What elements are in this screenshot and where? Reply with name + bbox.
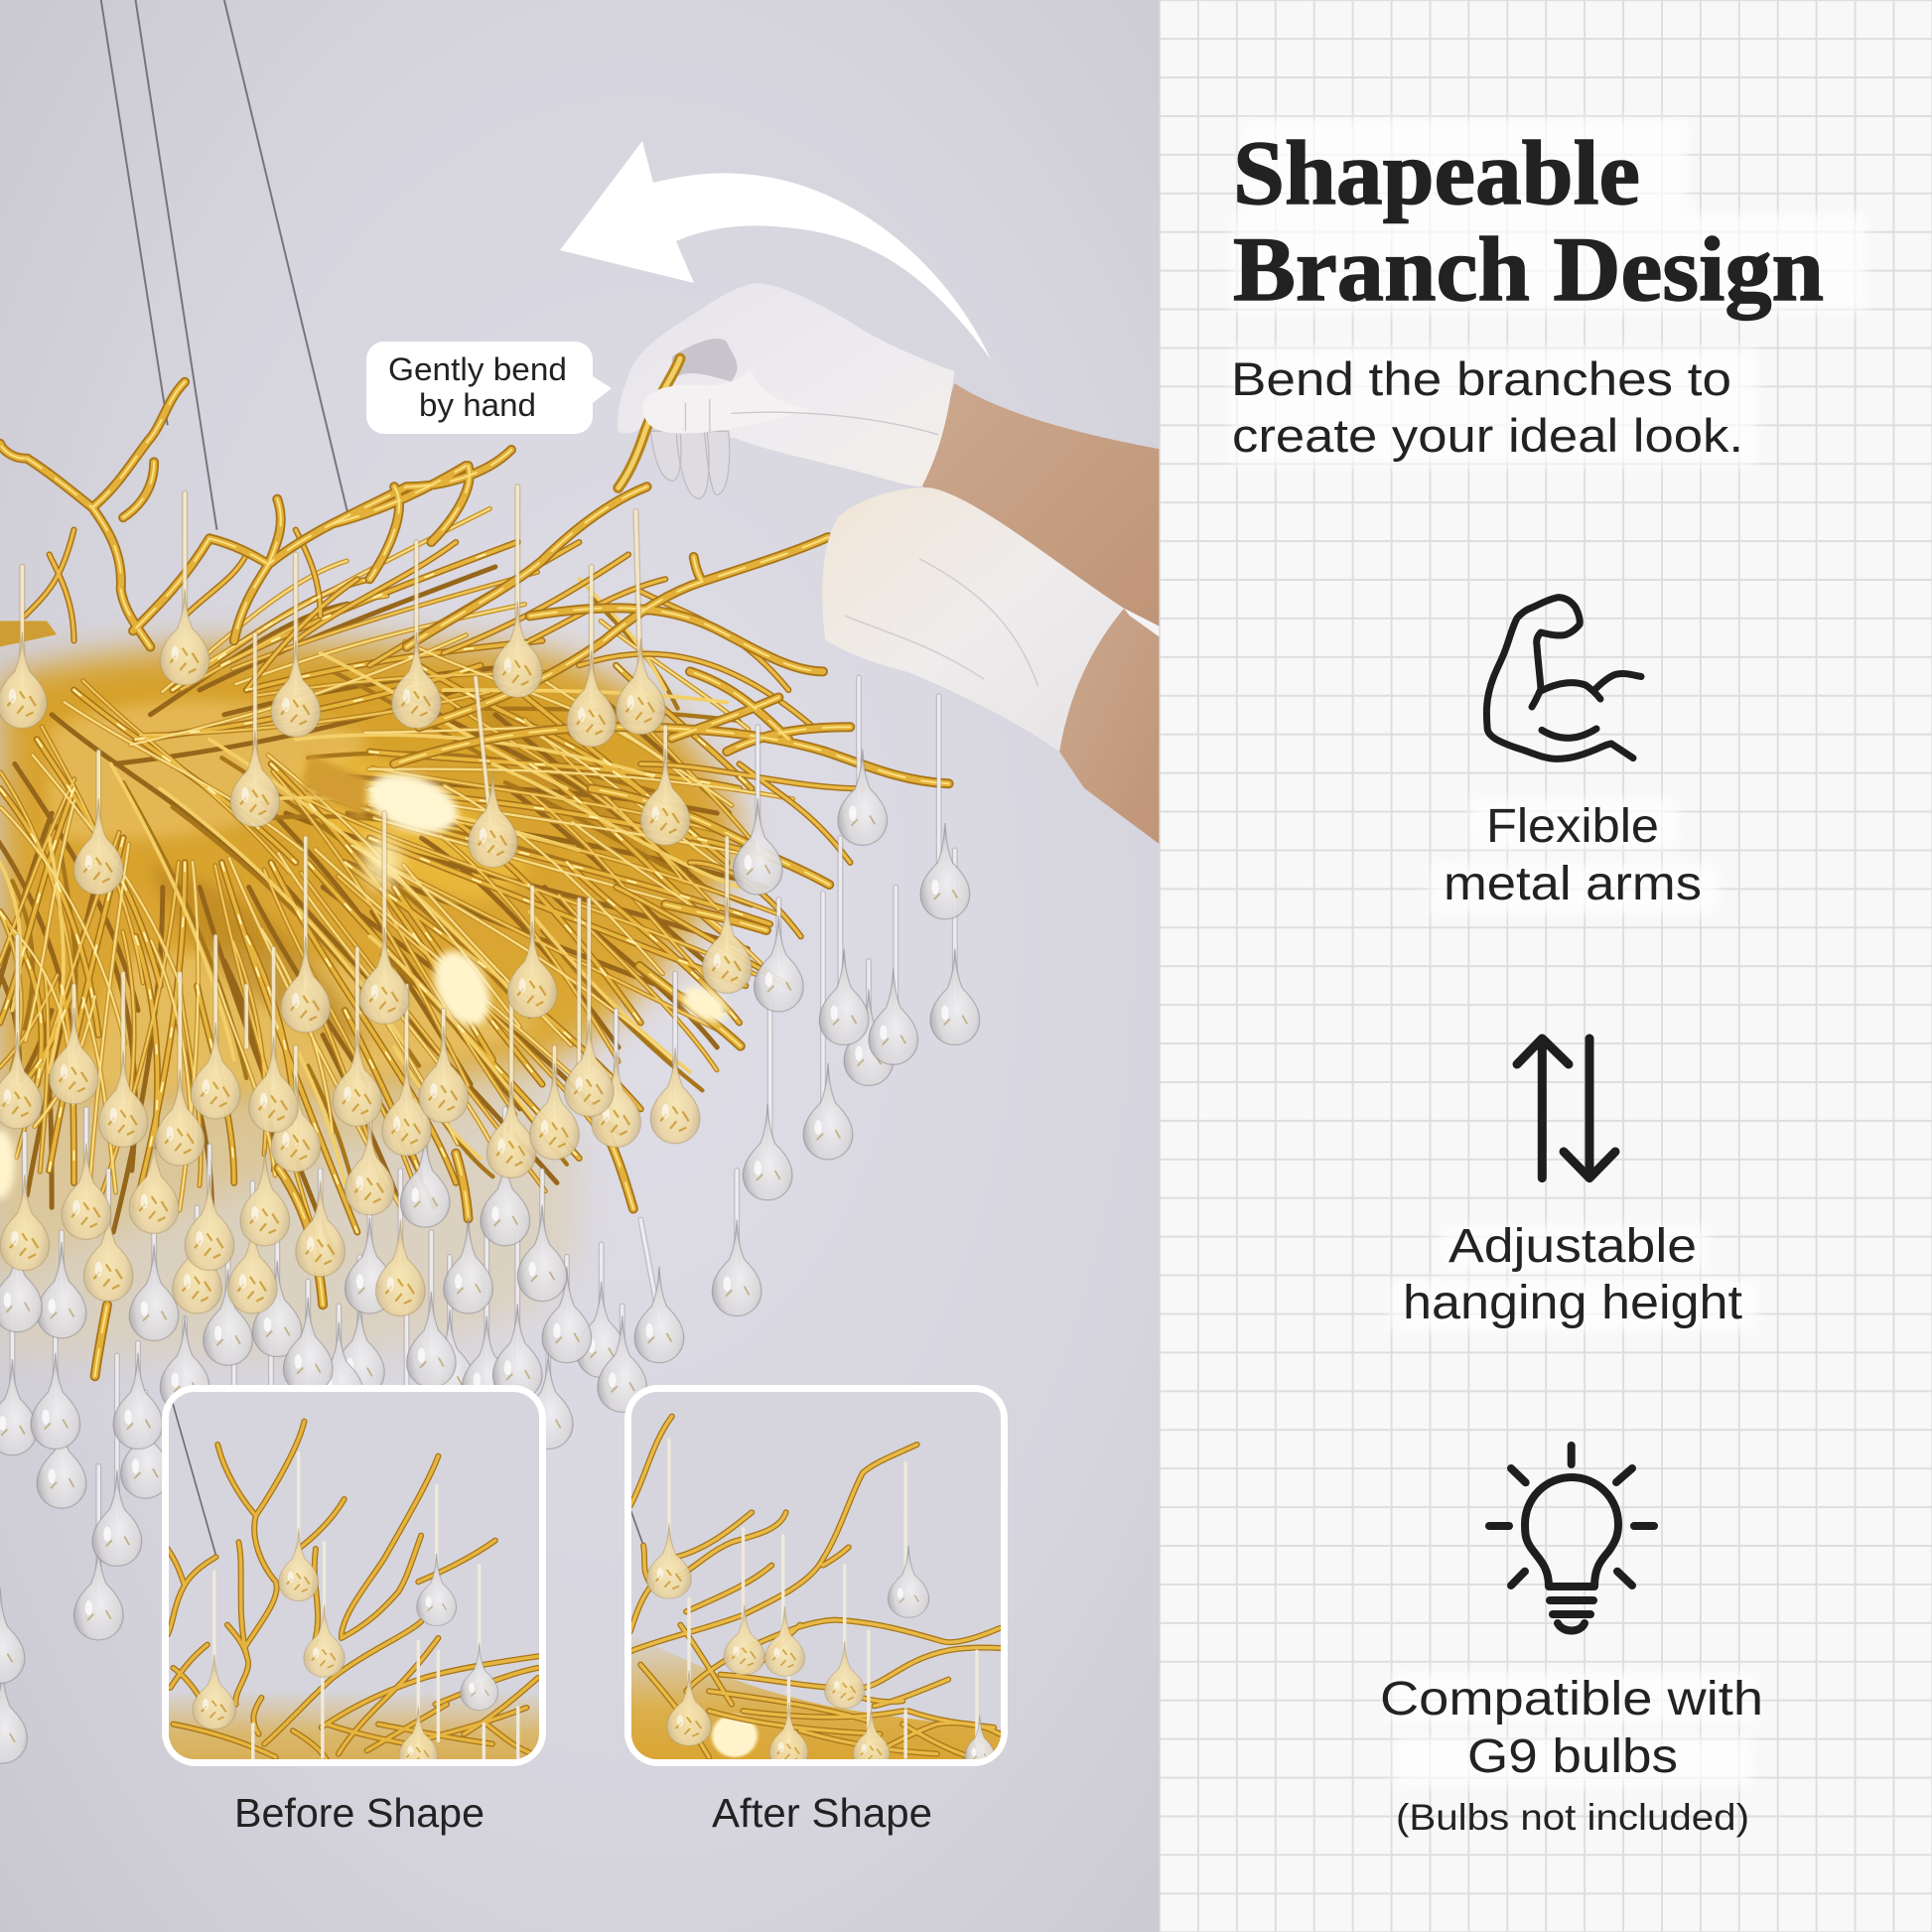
caption: before shape: Before Shape [234, 1790, 484, 1836]
label: (Bulbs not included) [1396, 1797, 1749, 1838]
arm: lower [1059, 609, 1159, 844]
panel: grid paper feature column [1160, 0, 1932, 1932]
feature: adjustable hanging height [1403, 1038, 1742, 1329]
title: Branch Design [1233, 218, 1824, 320]
glass stems [0, 486, 955, 1639]
label [1403, 1220, 1742, 1329]
arm: upper [922, 383, 1159, 626]
inset: after shape [623, 1385, 1008, 1771]
callout: gently bend by hand: Gently bend [388, 351, 567, 387]
subtitle [1231, 353, 1743, 463]
lit bulbs [0, 755, 734, 1199]
chandelier glow mass [0, 621, 738, 1356]
crystal drops [0, 589, 980, 1763]
subtitle: create your ideal look. [1232, 410, 1743, 463]
feature: compatible with G9 bulbs [1380, 1446, 1763, 1838]
hands and gloves [618, 283, 1159, 844]
label: metal arms [1444, 858, 1702, 910]
callout: gently bend by hand: by hand [419, 387, 536, 423]
inset: before shape [162, 1385, 549, 1773]
label [1380, 1673, 1763, 1838]
subtitle: Bend the branches to [1231, 353, 1731, 406]
curved white arrow [560, 141, 991, 359]
panel: chandelier photo [0, 0, 1160, 1932]
label [1444, 800, 1702, 910]
feature: flexible metal arms [1444, 598, 1702, 910]
label: Compatible with [1380, 1673, 1763, 1725]
title: Shapeable [1233, 122, 1640, 223]
title [1233, 122, 1824, 320]
gold branches [0, 382, 949, 1376]
icon: up and down arrows [1517, 1038, 1615, 1178]
glove: upper hand [618, 283, 954, 498]
icon: flexed arm [1486, 598, 1641, 759]
label: Flexible [1486, 800, 1659, 853]
label: hanging height [1403, 1277, 1742, 1329]
label: Adjustable [1449, 1220, 1697, 1273]
callout: gently bend by hand [366, 342, 612, 434]
hanging wires [101, 0, 348, 530]
glove: lower hand [822, 487, 1159, 752]
caption: after shape: After Shape [712, 1790, 932, 1836]
label: G9 bulbs [1467, 1730, 1678, 1783]
icon: light bulb [1489, 1446, 1654, 1630]
